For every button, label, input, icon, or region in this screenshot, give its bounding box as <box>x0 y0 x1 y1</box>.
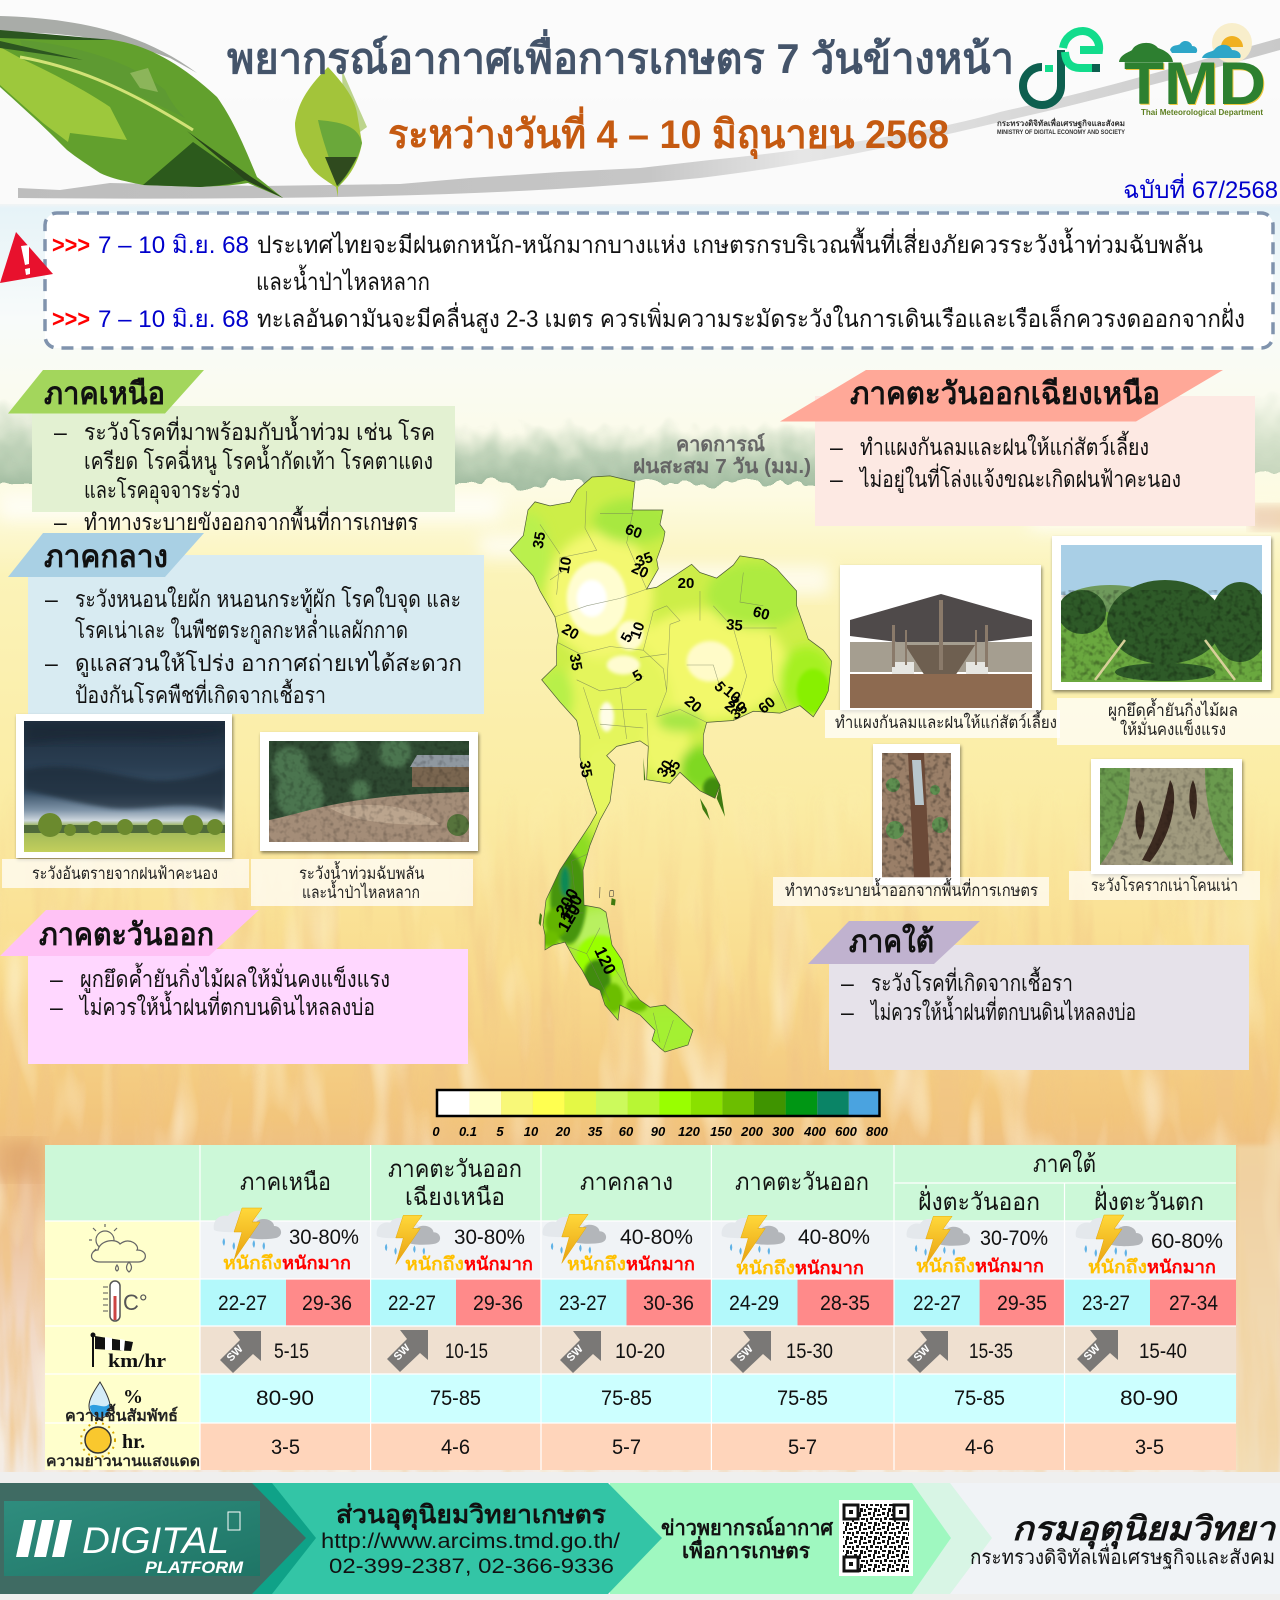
caption: supported fruit tree: ผูกยึดค้ำยันกิ่งไม้ผล <box>1108 698 1238 721</box>
column: northeast values: 4-6 <box>441 1436 470 1459</box>
icon: sunshine hours <box>46 1423 200 1470</box>
legend: rainfall colour scale: 35 <box>588 1124 603 1139</box>
column: north values: 80-90 <box>256 1387 314 1410</box>
north advice <box>54 416 435 535</box>
map: forecast accumulated rainfall, Thailand: 30 <box>654 757 677 780</box>
map: forecast accumulated rainfall, Thailand: 5 <box>630 667 646 686</box>
northeast advice: – <box>830 434 843 460</box>
column: north values: หนักมาก <box>282 1253 351 1273</box>
heading: north: ภาคเหนือ <box>44 376 165 411</box>
column: south west coast values: SW <box>1082 1342 1103 1363</box>
subtitle: forecast dates: ระหว่างวันที่ 4 – 10 มิถุนายน 2568 <box>388 106 949 160</box>
icon: humidity: ความชื้นสัมพัทธ์ <box>65 1403 178 1425</box>
legend: rainfall colour scale: 200 <box>740 1124 764 1139</box>
photo: livestock shelter <box>840 565 1041 710</box>
column: central values: หนักถึง <box>567 1254 626 1274</box>
north advice: ทำทางระบายขังออกจากพื้นที่การเกษตร <box>84 506 418 535</box>
contact block: http://www.arcims.tmd.go.th/ <box>321 1530 620 1553</box>
digital platform badge: PLATFORM <box>145 1558 244 1577</box>
photo: flash flood <box>260 732 478 851</box>
map: forecast accumulated rainfall, Thailand: 35 <box>727 700 751 723</box>
icon: wind sock km/hr <box>90 1332 167 1372</box>
central advice: – <box>45 650 58 676</box>
column: east values: หนักถึง <box>736 1258 795 1278</box>
column: east values: 5-7 <box>788 1436 817 1459</box>
column: south west coast values: 15-40 <box>1139 1340 1187 1363</box>
legend: rainfall colour scale <box>432 1090 889 1139</box>
title: พยากรณ์อากาศเพื่อการเกษตร 7 วันข้างหน้า <box>227 29 1014 82</box>
icon: humidity: % <box>123 1386 143 1408</box>
legend: rainfall colour scale: 150 <box>710 1124 733 1139</box>
column: central values: 75-85 <box>601 1387 652 1410</box>
map: forecast accumulated rainfall, Thailand: 20 <box>629 560 651 582</box>
column: northeast values: หนักถึง <box>405 1254 464 1274</box>
south advice: ระวังโรคที่เกิดจากเชื้อรา <box>871 967 1073 996</box>
column: south west coast values: หนักมาก <box>1147 1257 1216 1277</box>
map: forecast accumulated rainfall, Thailand: 35 <box>725 616 743 635</box>
heading: north <box>8 370 204 414</box>
caption: drainage ditch <box>773 877 1049 906</box>
heading: south: ภาคใต้ <box>849 923 934 959</box>
column: north values: 3-5 <box>271 1436 300 1459</box>
central advice <box>45 586 462 708</box>
map: forecast accumulated rainfall, Thailand: 120 <box>554 901 585 935</box>
line 1: 7 – 10 มิ.ย. 68 <box>98 232 249 259</box>
map label: ฝนสะสม 7 วัน (มม.) <box>633 456 811 478</box>
caption: livestock shelter: ทำแผงกันลมและฝนให้แก่สัตว์เลี้ยง <box>835 710 1057 732</box>
map: forecast accumulated rainfall, Thailand: 10 <box>720 683 744 706</box>
line 3: >>> <box>52 306 90 333</box>
map label <box>633 433 811 478</box>
map: forecast accumulated rainfall, Thailand: 35 <box>530 531 549 550</box>
map: forecast accumulated rainfall, Thailand: 60 <box>751 603 771 624</box>
column: northeast values <box>377 1215 533 1459</box>
north advice: ระวังโรคที่มาพร้อมกับน้ำท่วม เช่น โรค <box>84 416 435 445</box>
table headers: เฉียงเหนือ <box>405 1184 505 1211</box>
column: northeast values: 75-85 <box>430 1387 481 1410</box>
north advice: เครียด โรคฉี่หนู โรคน้ำกัดเท้า โรคตาแดง <box>84 445 433 475</box>
caption: drainage ditch: ทำทางระบายน้ำออกจากพื้นที่การเกษตร <box>785 878 1038 900</box>
caption: supported fruit tree: ให้มั่นคงแข็งแรง <box>1120 717 1226 739</box>
map label: คาดการณ์ <box>676 433 765 456</box>
column: central values: 23-27 <box>559 1292 607 1315</box>
column: northeast values: 22-27 <box>388 1292 436 1315</box>
column: south east coast values <box>907 1216 1048 1459</box>
logo: Thai Meteorological Department <box>1119 23 1267 118</box>
map: forecast accumulated rainfall, Thailand: 60 <box>623 521 644 543</box>
map: forecast accumulated rainfall, Thailand: 2 <box>721 697 739 716</box>
column: northeast values: 29-36 <box>473 1292 523 1315</box>
table cell fills <box>45 1145 1236 1470</box>
map: forecast accumulated rainfall, Thailand: 35 <box>576 760 595 779</box>
photo: storm clouds <box>16 714 232 858</box>
map: forecast accumulated rainfall, Thailand <box>500 473 840 1065</box>
heading: east: ภาคตะวันออก <box>39 917 214 952</box>
QR code <box>839 1500 913 1576</box>
column: south west coast values <box>1076 1215 1223 1459</box>
big leaf <box>0 16 283 198</box>
east advice <box>50 963 390 1020</box>
column: east values: 15-30 <box>786 1340 833 1363</box>
column: south east coast values: 29-35 <box>997 1292 1047 1315</box>
caption: storm <box>2 859 249 888</box>
legend: rainfall colour scale: 400 <box>803 1124 827 1139</box>
column: east values: 75-85 <box>777 1387 828 1410</box>
icon: humidity <box>65 1382 178 1425</box>
table headers: ภาคตะวันออก <box>388 1156 522 1183</box>
column: north values: 22-27 <box>218 1292 267 1315</box>
caption: supported fruit tree <box>1057 698 1280 745</box>
northeast advice <box>830 431 1181 493</box>
central advice: ดูแลสวนให้โปร่ง อากาศถ่ายเทได้สะดวก <box>75 650 462 677</box>
map: forecast accumulated rainfall, Thailand: 5 <box>618 630 637 646</box>
column: central values: SW <box>565 1343 586 1364</box>
digital platform badge: DIGITAL <box>82 1520 229 1561</box>
heading: south <box>808 921 980 964</box>
table headers: ภาคเหนือ <box>240 1169 331 1196</box>
north advice: – <box>54 419 67 445</box>
south advice: ไม่ควรให้น้ำฝนที่ตกบนดินไหลลงบ่อ <box>869 996 1136 1025</box>
column: north values: หนักถึง <box>223 1253 282 1273</box>
logo: ministry of digital economy: MINISTRY OF DIGITAL ECONOMY AND SOCIETY <box>997 130 1125 136</box>
line 3 <box>52 302 1245 334</box>
logo: ministry of digital economy <box>997 31 1125 136</box>
map: forecast accumulated rainfall, Thailand: 20 <box>678 575 694 592</box>
photo: root rot on trunk <box>1091 759 1242 874</box>
legend: rainfall colour scale: 0.1 <box>459 1124 477 1139</box>
column: south east coast values: หนักมาก <box>975 1256 1044 1276</box>
QR caption: ข่าวพยากรณ์อากาศ <box>661 1516 834 1540</box>
small leaf <box>295 67 367 197</box>
map: forecast accumulated rainfall, Thailand: 35 <box>566 653 585 672</box>
line 1: >>> <box>52 232 90 259</box>
column: northeast values: SW <box>392 1342 413 1363</box>
panel: south <box>808 921 1249 1070</box>
legend: rainfall colour scale: 5 <box>496 1124 504 1139</box>
table headers: ภาคใต้ <box>1033 1150 1096 1178</box>
column: central values: 30-36 <box>643 1292 694 1315</box>
column: south west coast values: 60-80% <box>1151 1230 1223 1253</box>
contact block <box>321 1501 620 1578</box>
central advice: โรคเน่าเละ ในพืชตระกูลกะหล่ำแลผักกาด <box>75 614 408 644</box>
map: forecast accumulated rainfall, Thailand: 10 <box>627 620 649 641</box>
east advice: – <box>50 994 63 1020</box>
QR caption <box>661 1516 834 1563</box>
column: south east coast values: 30-70% <box>980 1227 1048 1250</box>
department name: กรมอุตุนิยมวิทยา <box>1012 1510 1277 1550</box>
table: regional forecast <box>45 1145 1236 1470</box>
alert box <box>45 213 1273 348</box>
column: east values: 24-29 <box>729 1292 779 1315</box>
panel: east <box>0 910 468 1064</box>
table headers: ภาคกลาง <box>580 1169 673 1196</box>
panel: central <box>8 533 484 714</box>
column: central values: 40-80% <box>620 1226 693 1249</box>
QR caption: เพื่อการเกษตร <box>682 1535 811 1563</box>
map: forecast accumulated rainfall, Thailand: 20 <box>559 621 582 644</box>
logo: ministry of digital economy: กระทรวงดิจิทัลเพื่อเศรษฐกิจและสังคม <box>997 117 1125 129</box>
column: south east coast values: 4-6 <box>965 1436 994 1459</box>
east advice: – <box>50 966 63 992</box>
legend: rainfall colour scale: 60 <box>619 1124 634 1139</box>
column: east values <box>722 1215 870 1459</box>
swoosh <box>18 38 1280 199</box>
column: east values: หนักมาก <box>795 1258 864 1278</box>
column: south west coast values: 3-5 <box>1135 1436 1164 1459</box>
column: central values <box>543 1214 695 1459</box>
map: forecast accumulated rainfall, Thailand: 20 <box>681 693 705 716</box>
digital platform badge <box>4 1501 260 1577</box>
legend: rainfall colour scale: 0 <box>432 1124 440 1139</box>
logo: Thai Meteorological Department: TMD <box>1125 51 1267 118</box>
east advice: ผูกยึดค้ำยันกิ่งไม้ผลให้มั่นคงแข็งแรง <box>80 963 390 993</box>
column: south east coast values: 22-27 <box>913 1292 961 1315</box>
caption: livestock shelter <box>825 710 1060 738</box>
northeast advice: ไม่อยู่ในที่โล่งแจ้งขณะเกิดฝนฟ้าคะนอง <box>858 463 1181 493</box>
column: central values: 5-7 <box>612 1436 641 1459</box>
map: forecast accumulated rainfall, Thailand: 60 <box>755 694 779 717</box>
caption: flash flood: และน้ำป่าไหลหลาก <box>302 880 420 902</box>
icon: wind sock km/hr: km/hr <box>108 1351 167 1372</box>
column: northeast values: 30-80% <box>454 1226 525 1249</box>
column: northeast values: หนักมาก <box>464 1254 533 1274</box>
icon: sunshine hours: hr. <box>122 1431 145 1453</box>
heading: northeast: ภาคตะวันออกเฉียงเหนือ <box>850 376 1160 411</box>
caption: flash flood: ระวังน้ำท่วมฉับพลัน <box>299 861 425 883</box>
legend: rainfall colour scale: 120 <box>678 1124 701 1139</box>
northeast advice: ทำแผงกันลมและฝนให้แก่สัตว์เลี้ยง <box>860 431 1149 460</box>
table headers: ฝั่งตะวันออก <box>918 1185 1040 1216</box>
column: south west coast values: หนักถึง <box>1088 1257 1147 1277</box>
contact block: 02-399-2387, 02-366-9336 <box>329 1555 614 1578</box>
column: south east coast values: 75-85 <box>954 1387 1005 1410</box>
icon: weather <box>89 1224 145 1272</box>
department name <box>970 1510 1277 1569</box>
contact block: ส่วนอุตุนิยมวิทยาเกษตร <box>336 1501 607 1531</box>
northeast advice: – <box>830 466 843 492</box>
icon: thermometer: C° <box>123 1290 148 1315</box>
edition number: ฉบับที่ 67/2568 <box>1123 173 1278 204</box>
column: south west coast values: 23-27 <box>1082 1292 1130 1315</box>
table headers <box>240 1150 1204 1216</box>
column: north values <box>214 1208 359 1459</box>
column: north values: 30-80% <box>289 1226 359 1249</box>
central advice: ป้องกันโรคพืชที่เกิดจากเชื้อรา <box>75 679 326 708</box>
column: east values: 28-35 <box>820 1292 870 1315</box>
map: forecast accumulated rainfall, Thailand: 35 <box>634 549 655 571</box>
column: north values: 29-36 <box>302 1292 352 1315</box>
map: forecast accumulated rainfall, Thailand: 200 <box>552 885 583 919</box>
legend: rainfall colour scale: 90 <box>651 1124 666 1139</box>
map: forecast accumulated rainfall, Thailand: 5 <box>710 678 729 696</box>
caption: storm: ระวังอันตรายจากฝนฟ้าคะนอง <box>32 864 218 883</box>
column: northeast values: 10-15 <box>445 1340 488 1363</box>
footer band <box>0 1483 1280 1594</box>
column: east values: SW <box>735 1343 756 1364</box>
line 1: ประเทศไทยจะมีฝนตกหนัก-หนักมากบางแห่ง เกษตรกรบริเวณพื้นที่เสี่ยงภัยควรระวังน้ำท่วมฉับพลัน <box>257 227 1203 259</box>
map: forecast accumulated rainfall, Thailand: 35 <box>662 757 685 780</box>
icon: thermometer <box>103 1281 148 1321</box>
legend: rainfall colour scale: 800 <box>866 1124 889 1139</box>
line 2: และน้ำป่าไหลหลาก <box>256 264 430 296</box>
header decoration: leaves and swoosh <box>0 0 1280 204</box>
heading: central: ภาคกลาง <box>44 539 168 574</box>
panel: north <box>8 370 455 535</box>
line 1 <box>52 227 1203 259</box>
map: forecast accumulated rainfall, Thailand: 10 <box>556 556 575 575</box>
east advice: ไม่ควรให้น้ำฝนที่ตกบนดินไหลลงบ่อ <box>78 991 375 1020</box>
logo: Thai Meteorological Department: TMD <box>1124 50 1266 117</box>
legend: rainfall colour scale: 20 <box>555 1124 571 1139</box>
icon: sunshine hours: ความยาวนานแสงแดด <box>46 1453 200 1470</box>
column: south west coast values: 80-90 <box>1120 1387 1178 1410</box>
map: forecast accumulated rainfall, Thailand: 20 <box>725 693 749 716</box>
caption: root rot: ระวังโรครากเน่าโคนเน่า <box>1091 875 1238 895</box>
column: south east coast values: หนักถึง <box>916 1256 975 1276</box>
south advice: – <box>841 970 854 996</box>
column: east values: 40-80% <box>798 1226 870 1249</box>
line 3: 7 – 10 มิ.ย. 68 <box>98 306 249 333</box>
caption: flash flood <box>251 859 473 906</box>
legend: rainfall colour scale: 600 <box>835 1124 858 1139</box>
north advice: – <box>54 509 67 535</box>
map: forecast accumulated rainfall, Thailand: 120 <box>590 944 620 978</box>
heading: northeast <box>780 370 1223 422</box>
column: south west coast values: 27-34 <box>1169 1292 1218 1315</box>
south advice <box>841 967 1136 1025</box>
legend: rainfall colour scale: 300 <box>772 1124 795 1139</box>
column: central values: 10-20 <box>615 1340 665 1363</box>
icon: warning triangle <box>0 232 53 283</box>
heading: central <box>8 533 204 577</box>
photo: supported fruit tree <box>1052 536 1271 690</box>
central advice: ระวังหนอนใยผัก หนอนกระทู้ผัก โรคใบจุด และ <box>75 586 461 613</box>
heading: east <box>0 910 259 956</box>
north advice: และโรคอุจจาระร่วง <box>84 477 240 504</box>
column: south east coast values: SW <box>912 1343 933 1364</box>
panel: northeast <box>780 370 1255 526</box>
logo: Thai Meteorological Department: Thai Meteorological Department <box>1141 108 1263 117</box>
south advice: – <box>841 999 854 1025</box>
column: north values: 5-15 <box>274 1340 309 1363</box>
table headers: ภาคตะวันออก <box>735 1169 869 1196</box>
column: central values: หนักมาก <box>626 1254 695 1274</box>
legend: rainfall colour scale: 10 <box>524 1124 539 1139</box>
map: forecast accumulated rainfall, Thailand: 150 <box>556 891 587 925</box>
photo: drainage ditch <box>873 744 960 885</box>
table headers: ฝั่งตะวันตก <box>1094 1185 1204 1216</box>
central advice: – <box>45 586 58 612</box>
column: north values: SW <box>225 1343 246 1364</box>
caption: root rot <box>1069 871 1260 900</box>
column: south east coast values: 15-35 <box>969 1340 1013 1363</box>
